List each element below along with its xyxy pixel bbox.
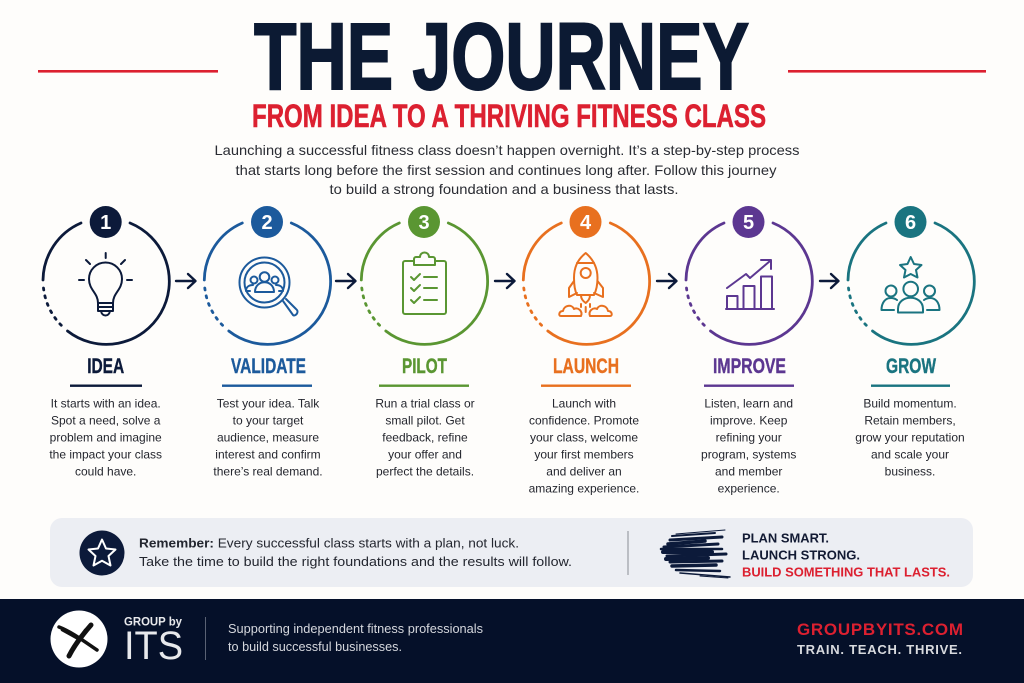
ring 5 — [686, 223, 812, 344]
description: confidence. Promote — [529, 414, 639, 428]
badge 6 — [894, 206, 926, 238]
ring 4 — [523, 223, 650, 344]
tagline — [228, 622, 483, 654]
icon: bar chart with arrow — [726, 260, 774, 309]
underline — [541, 384, 631, 387]
logo wordmark: ITS — [124, 624, 183, 668]
slogan: LAUNCH STRONG. — [742, 548, 860, 562]
ring 1 — [43, 223, 169, 344]
title rule left — [38, 70, 218, 73]
description — [375, 396, 475, 478]
description: interest and confirm — [215, 448, 321, 462]
label LAUNCH: LAUNCH — [553, 355, 619, 378]
label GROW: GROW — [886, 355, 936, 378]
underline — [871, 384, 950, 387]
badge 5 — [732, 206, 764, 238]
description: Build momentum. — [863, 396, 957, 410]
description: your class, welcome — [530, 430, 638, 444]
icon: star badge — [80, 530, 124, 576]
step 3: pilot — [361, 206, 488, 478]
intro text: Launching a successful fitness class doesn’t happen overnight. It’s a step-by-step process — [214, 142, 800, 158]
footer — [0, 599, 1024, 683]
label VALIDATE: VALIDATE — [231, 355, 306, 378]
arrow 4 — [657, 274, 676, 288]
arrow 2 — [336, 274, 356, 288]
description: the impact your class — [49, 448, 162, 462]
website: GROUPBYITS.COM — [797, 620, 963, 639]
icon: rocket — [559, 253, 612, 316]
badge 6: 6 — [905, 212, 916, 234]
step 2: validate — [204, 206, 331, 478]
description: improve. Keep — [710, 414, 788, 428]
description: small pilot. Get — [385, 414, 465, 428]
ring 6 — [848, 223, 974, 344]
badge 1: 1 — [100, 212, 111, 234]
motto: TRAIN. TEACH. THRIVE. — [797, 642, 962, 657]
brush stroke — [661, 530, 730, 578]
slogan: BUILD SOMETHING THAT LASTS. — [742, 564, 950, 580]
divider — [205, 617, 206, 660]
description: problem and imagine — [50, 430, 162, 444]
icon: light bulb — [79, 253, 132, 316]
intro text: that starts long before the first session and continues long after. Follow this journey — [236, 162, 776, 178]
description: Retain members, — [864, 414, 956, 428]
step 5: improve — [686, 206, 812, 496]
tagline: to build successful businesses. — [228, 640, 402, 654]
description — [49, 396, 162, 478]
description — [701, 396, 796, 496]
remember text: Remember: Every successful class starts with a plan, not luck. — [139, 536, 519, 550]
ring 2 — [204, 223, 331, 344]
underline — [222, 384, 312, 387]
remember text — [139, 536, 572, 569]
icon: team with star — [882, 257, 940, 312]
panel: remember callout — [50, 518, 973, 587]
icon: clipboard checklist — [403, 252, 446, 314]
label PILOT: PILOT — [402, 355, 447, 378]
step 1: idea — [43, 206, 169, 478]
description: program, systems — [701, 448, 796, 462]
slogan — [742, 531, 950, 580]
arrow 1 — [176, 274, 196, 288]
underline — [70, 384, 142, 387]
description: Spot a need, solve a — [51, 414, 161, 428]
remember text: Take the time to build the right foundations and the results will follow. — [139, 554, 572, 569]
label IMPROVE: IMPROVE — [713, 355, 786, 378]
icon: magnifier with people — [240, 258, 298, 315]
badge 2 — [251, 206, 283, 238]
underline — [704, 384, 794, 387]
description: your first members — [534, 448, 634, 462]
step 4: launch — [523, 206, 650, 496]
arrow 3 — [495, 274, 514, 288]
description: and deliver an — [546, 464, 622, 478]
divider — [628, 531, 629, 575]
description: Listen, learn and — [704, 396, 793, 410]
badge 4 — [570, 206, 602, 238]
badge 2: 2 — [261, 212, 273, 234]
description: experience. — [718, 482, 780, 496]
intro text — [214, 142, 800, 197]
badge 3 — [408, 206, 440, 238]
badge 1 — [90, 206, 122, 238]
label IDEA: IDEA — [87, 355, 124, 378]
ring 3 — [361, 223, 488, 344]
badge 3: 3 — [418, 212, 430, 234]
underline — [379, 384, 469, 387]
step 6: grow — [848, 206, 974, 478]
description: and scale your — [871, 448, 949, 462]
description: there’s real demand. — [213, 464, 323, 478]
description: Run a trial class or — [375, 396, 475, 410]
description: business. — [885, 464, 935, 478]
title rule right — [788, 70, 986, 73]
description: audience, measure — [217, 430, 319, 444]
intro text: to build a strong foundation and a business that lasts. — [330, 181, 678, 197]
badge 5: 5 — [743, 212, 754, 234]
arrow 5 — [820, 274, 838, 288]
description: It starts with an idea. — [51, 396, 161, 410]
description — [855, 396, 965, 478]
description: Launch with — [552, 396, 616, 410]
description: to your target — [233, 414, 304, 428]
description: refining your — [716, 430, 782, 444]
description: perfect the details. — [376, 464, 474, 478]
description: grow your reputation — [855, 430, 965, 444]
description — [529, 396, 639, 496]
description: and member — [715, 464, 782, 478]
badge 4: 4 — [580, 212, 592, 234]
description — [213, 396, 323, 478]
subtitle: FROM IDEA TO A THRIVING FITNESS CLASS — [252, 98, 766, 134]
description: could have. — [75, 464, 136, 478]
slogan: PLAN SMART. — [742, 531, 829, 546]
description: Test your idea. Talk — [217, 396, 320, 410]
description: your offer and — [388, 448, 462, 462]
description: amazing experience. — [529, 482, 639, 496]
tagline: Supporting independent fitness professionals — [228, 622, 483, 636]
description: feedback, refine — [382, 430, 468, 444]
title: THE JOURNEY — [254, 4, 749, 110]
logo wordmark: GROUP by — [124, 617, 183, 629]
logo mark — [50, 610, 108, 668]
